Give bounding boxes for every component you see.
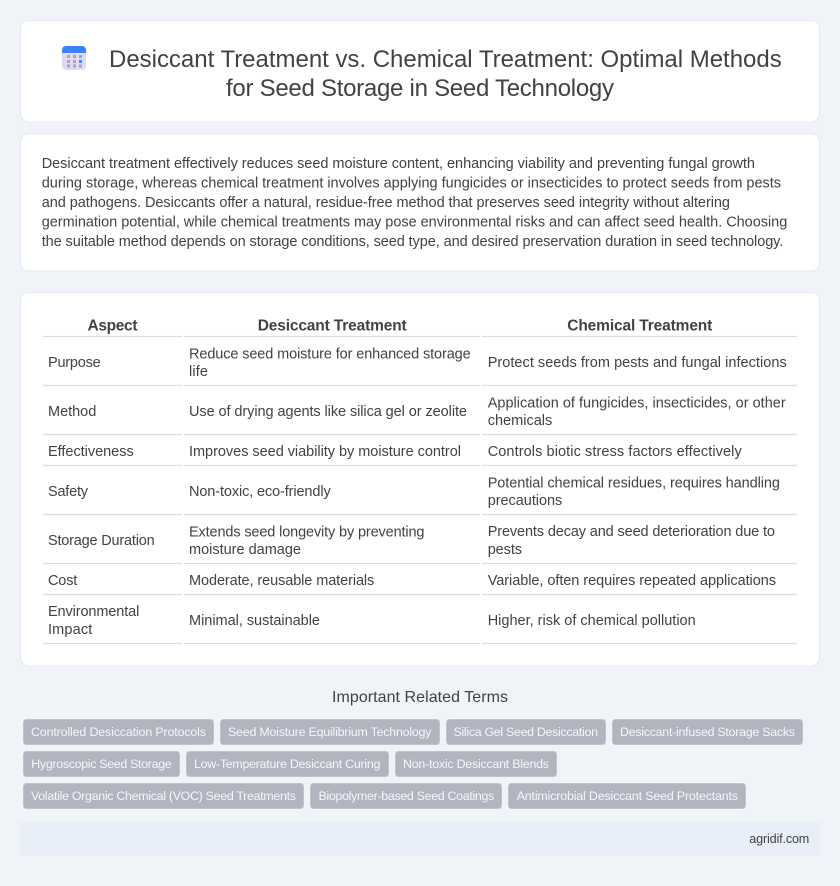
tag <box>396 752 556 776</box>
row: safety: Safety <box>48 484 89 500</box>
table header row: Chemical Treatment <box>567 318 712 335</box>
tag: Seed Moisture Equilibrium Technology <box>228 725 432 739</box>
tag: Silica Gel Seed Desiccation <box>454 725 598 739</box>
text block: introduction paragraph: germination potential, while chemical treatments may pose environmental risks and can affect seed health. Choosing <box>42 215 787 231</box>
row: cost: Moderate, reusable materials <box>189 573 374 589</box>
row: environmental impact: Environmental <box>48 604 139 620</box>
tag <box>508 784 746 808</box>
tag: Desiccant-infused Storage Sacks <box>620 725 795 739</box>
footer: agridif.com <box>749 832 809 846</box>
row: storage duration: moisture damage <box>189 542 301 558</box>
row: effectiveness: Improves seed viability by moisture control <box>189 444 461 460</box>
row: storage duration: Prevents decay and seed deterioration due to <box>488 524 775 540</box>
table header row: Aspect <box>88 318 138 335</box>
heading: related terms: Important Related Terms <box>332 689 508 706</box>
title <box>109 46 782 102</box>
row: purpose: Reduce seed moisture for enhanced storage <box>189 346 471 362</box>
row: method: Method <box>48 404 96 420</box>
row: method: chemicals <box>488 413 552 429</box>
tag <box>24 720 214 744</box>
row: storage duration: Extends seed longevity by preventing <box>189 524 424 540</box>
title: for Seed Storage in Seed Technology <box>226 75 614 102</box>
row: purpose <box>48 346 787 380</box>
panel: introduction <box>20 134 820 271</box>
tag: Controlled Desiccation Protocols <box>31 725 206 739</box>
tag: Biopolymer-based Seed Coatings <box>318 789 494 803</box>
tag: Non-toxic Desiccant Blends <box>403 757 549 771</box>
row: safety: Non-toxic, eco-friendly <box>189 484 331 500</box>
row: environmental impact: Minimal, sustainable <box>189 613 320 629</box>
tag <box>24 752 180 776</box>
tags: related terms <box>24 720 802 808</box>
text block: introduction paragraph: during storage, whereas chemical treatment involves applying fungicides or insecticides to protect seeds from pests <box>42 175 781 191</box>
text block: introduction paragraph: Desiccant treatment effectively reduces seed moisture content, enhancing viability and preventing fungal growth <box>42 156 755 172</box>
row: method: Use of drying agents like silica gel or zeolite <box>189 404 467 420</box>
row: storage duration: pests <box>488 542 522 558</box>
row: purpose: Protect seeds from pests and fungal infections <box>488 355 787 371</box>
tag: Antimicrobial Desiccant Seed Protectants <box>517 789 738 803</box>
row: environmental impact <box>48 604 696 638</box>
row: cost: Variable, often requires repeated applications <box>488 573 776 589</box>
row: safety <box>48 475 780 509</box>
row: method <box>48 395 786 429</box>
title: Desiccant Treatment vs. Chemical Treatment: Optimal Methods <box>109 46 782 73</box>
text block: introduction paragraph: and pathogens. Desiccants offer a natural, residue-free method that preserves seed integrity without altering <box>42 195 730 211</box>
icon: calendar <box>62 46 86 70</box>
table header row <box>88 318 712 335</box>
tag <box>612 720 802 744</box>
row: effectiveness <box>48 444 742 460</box>
tag <box>446 720 606 744</box>
tag <box>220 720 440 744</box>
row: effectiveness: Controls biotic stress factors effectively <box>488 444 742 460</box>
tag <box>24 784 304 808</box>
row: effectiveness: Effectiveness <box>48 444 134 460</box>
panel: header <box>20 20 820 122</box>
tag: Hygroscopic Seed Storage <box>31 757 172 771</box>
footer <box>20 822 820 856</box>
row: safety: Potential chemical residues, requires handling <box>488 475 780 491</box>
row: environmental impact: Impact <box>48 622 92 638</box>
text block: introduction paragraph: the suitable method depends on storage conditions, seed type, and desired preservation duration in seed technology. <box>42 234 783 250</box>
tag <box>186 752 388 776</box>
table header row: Desiccant Treatment <box>258 318 407 335</box>
row: environmental impact: Higher, risk of chemical pollution <box>488 613 696 629</box>
row: storage duration <box>48 524 775 558</box>
row: safety: precautions <box>488 493 562 509</box>
tag: Volatile Organic Chemical (VOC) Seed Treatments <box>31 789 296 803</box>
tag <box>310 784 502 808</box>
text block: introduction paragraph <box>42 156 787 250</box>
row: cost <box>48 573 776 589</box>
row: purpose: life <box>189 364 208 380</box>
row: storage duration: Storage Duration <box>48 533 155 549</box>
row: cost: Cost <box>48 573 77 589</box>
panel: comparison table <box>20 292 820 666</box>
tag: Low-Temperature Desiccant Curing <box>194 757 380 771</box>
row: purpose: Purpose <box>48 355 101 371</box>
row: method: Application of fungicides, insecticides, or other <box>488 395 786 411</box>
